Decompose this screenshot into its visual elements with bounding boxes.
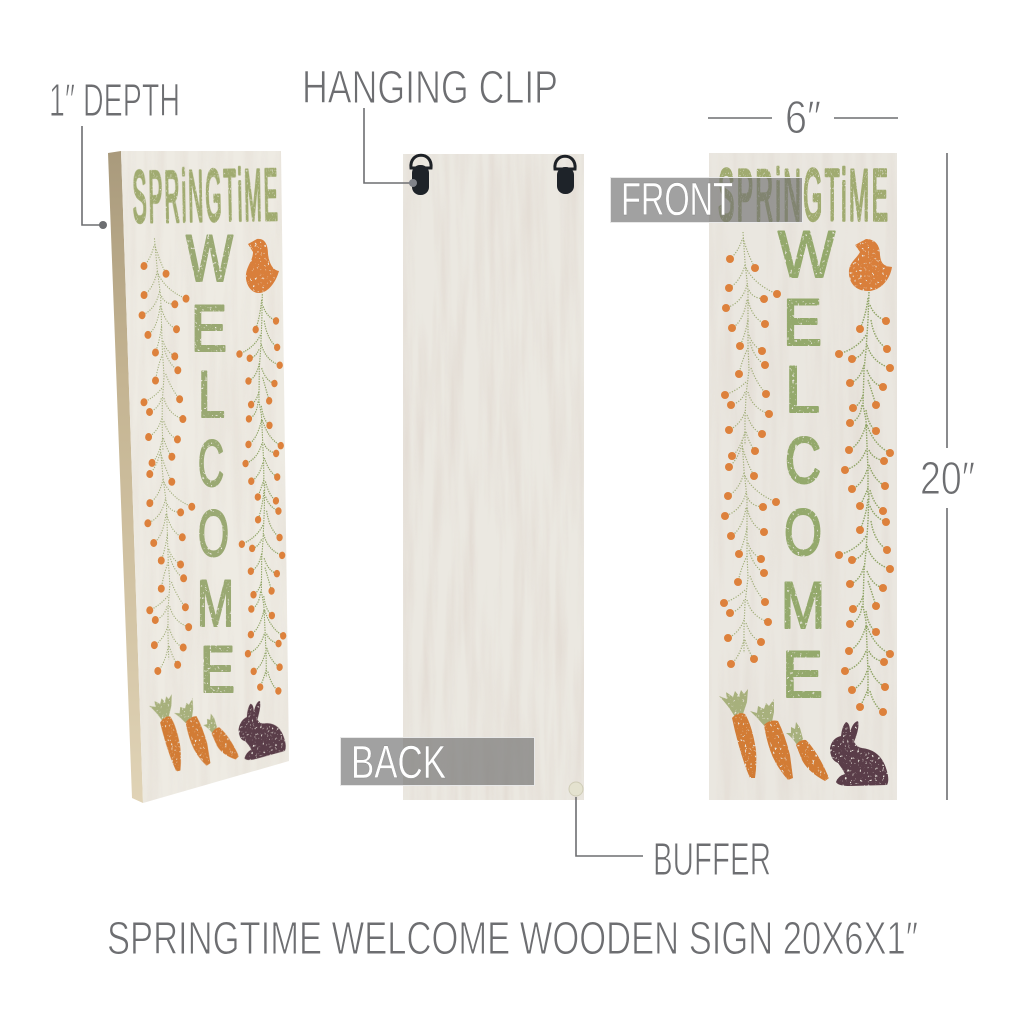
- wood grain texture: [150, 743, 152, 755]
- word: welcome, vertical: L: [785, 352, 820, 426]
- word: welcome, vertical: W: [186, 221, 234, 295]
- word: welcome, vertical: E: [191, 291, 227, 365]
- buffer peg: [569, 782, 583, 796]
- grain texture: [709, 153, 897, 800]
- word: welcome, vertical: C: [785, 423, 821, 497]
- front board: [709, 153, 897, 800]
- icon: bird: [246, 239, 279, 293]
- label: back tag: BACK: [351, 736, 446, 788]
- back board: [403, 154, 584, 800]
- label: front tag: FRONT: [621, 173, 733, 225]
- callout: buffer: [576, 797, 771, 885]
- callout: hanging clip: HANGING CLIP: [302, 61, 558, 113]
- callout: hanging clip: [302, 61, 558, 187]
- word: welcome, vertical: E: [782, 637, 823, 711]
- word: welcome, vertical: M: [781, 568, 825, 642]
- panel: front of sign: [709, 153, 897, 800]
- right berry vine: [236, 293, 287, 697]
- dimension: 6 inch width: 6″: [785, 91, 821, 143]
- left berry vine: [134, 236, 201, 675]
- word: welcome, vertical: L: [198, 357, 225, 431]
- word: welcome, vertical: W: [778, 217, 836, 291]
- icon: bird: [849, 239, 892, 291]
- word: welcome, vertical: [186, 221, 235, 706]
- word: welcome, vertical: O: [198, 496, 229, 570]
- icons: carrots and rabbit: [719, 689, 888, 786]
- callout: buffer: BUFFER: [653, 833, 771, 885]
- word: welcome, vertical: E: [200, 632, 235, 706]
- word: welcome, vertical: [778, 217, 836, 711]
- sign front face: [121, 151, 289, 803]
- word: welcome, vertical: O: [784, 495, 822, 569]
- distressed texture: [403, 154, 584, 800]
- panel: angled view of sign showing depth: [108, 150, 295, 805]
- right berry vine: [835, 292, 894, 716]
- word: welcome, vertical: M: [197, 566, 234, 640]
- dimension: 20 inch height: 20″: [920, 452, 975, 504]
- callout: 1 inch depth: 1″ DEPTH: [49, 74, 180, 126]
- icons: carrots and rabbit: [149, 667, 286, 785]
- left hanging clip: [411, 155, 431, 195]
- sign side edge: [108, 151, 143, 803]
- word: welcome, vertical: C: [198, 426, 224, 500]
- panel: back of sign: [403, 154, 584, 800]
- left berry vine: [720, 232, 781, 668]
- label: back tag: [340, 736, 534, 788]
- heading: springtime: SPRiNGTiME: [132, 156, 278, 238]
- heading: springtime: SPRiNGTiME: [718, 156, 888, 236]
- word: welcome, vertical: E: [783, 285, 822, 359]
- callout: 1 inch depth: [49, 74, 180, 229]
- right hanging clip: [555, 156, 575, 194]
